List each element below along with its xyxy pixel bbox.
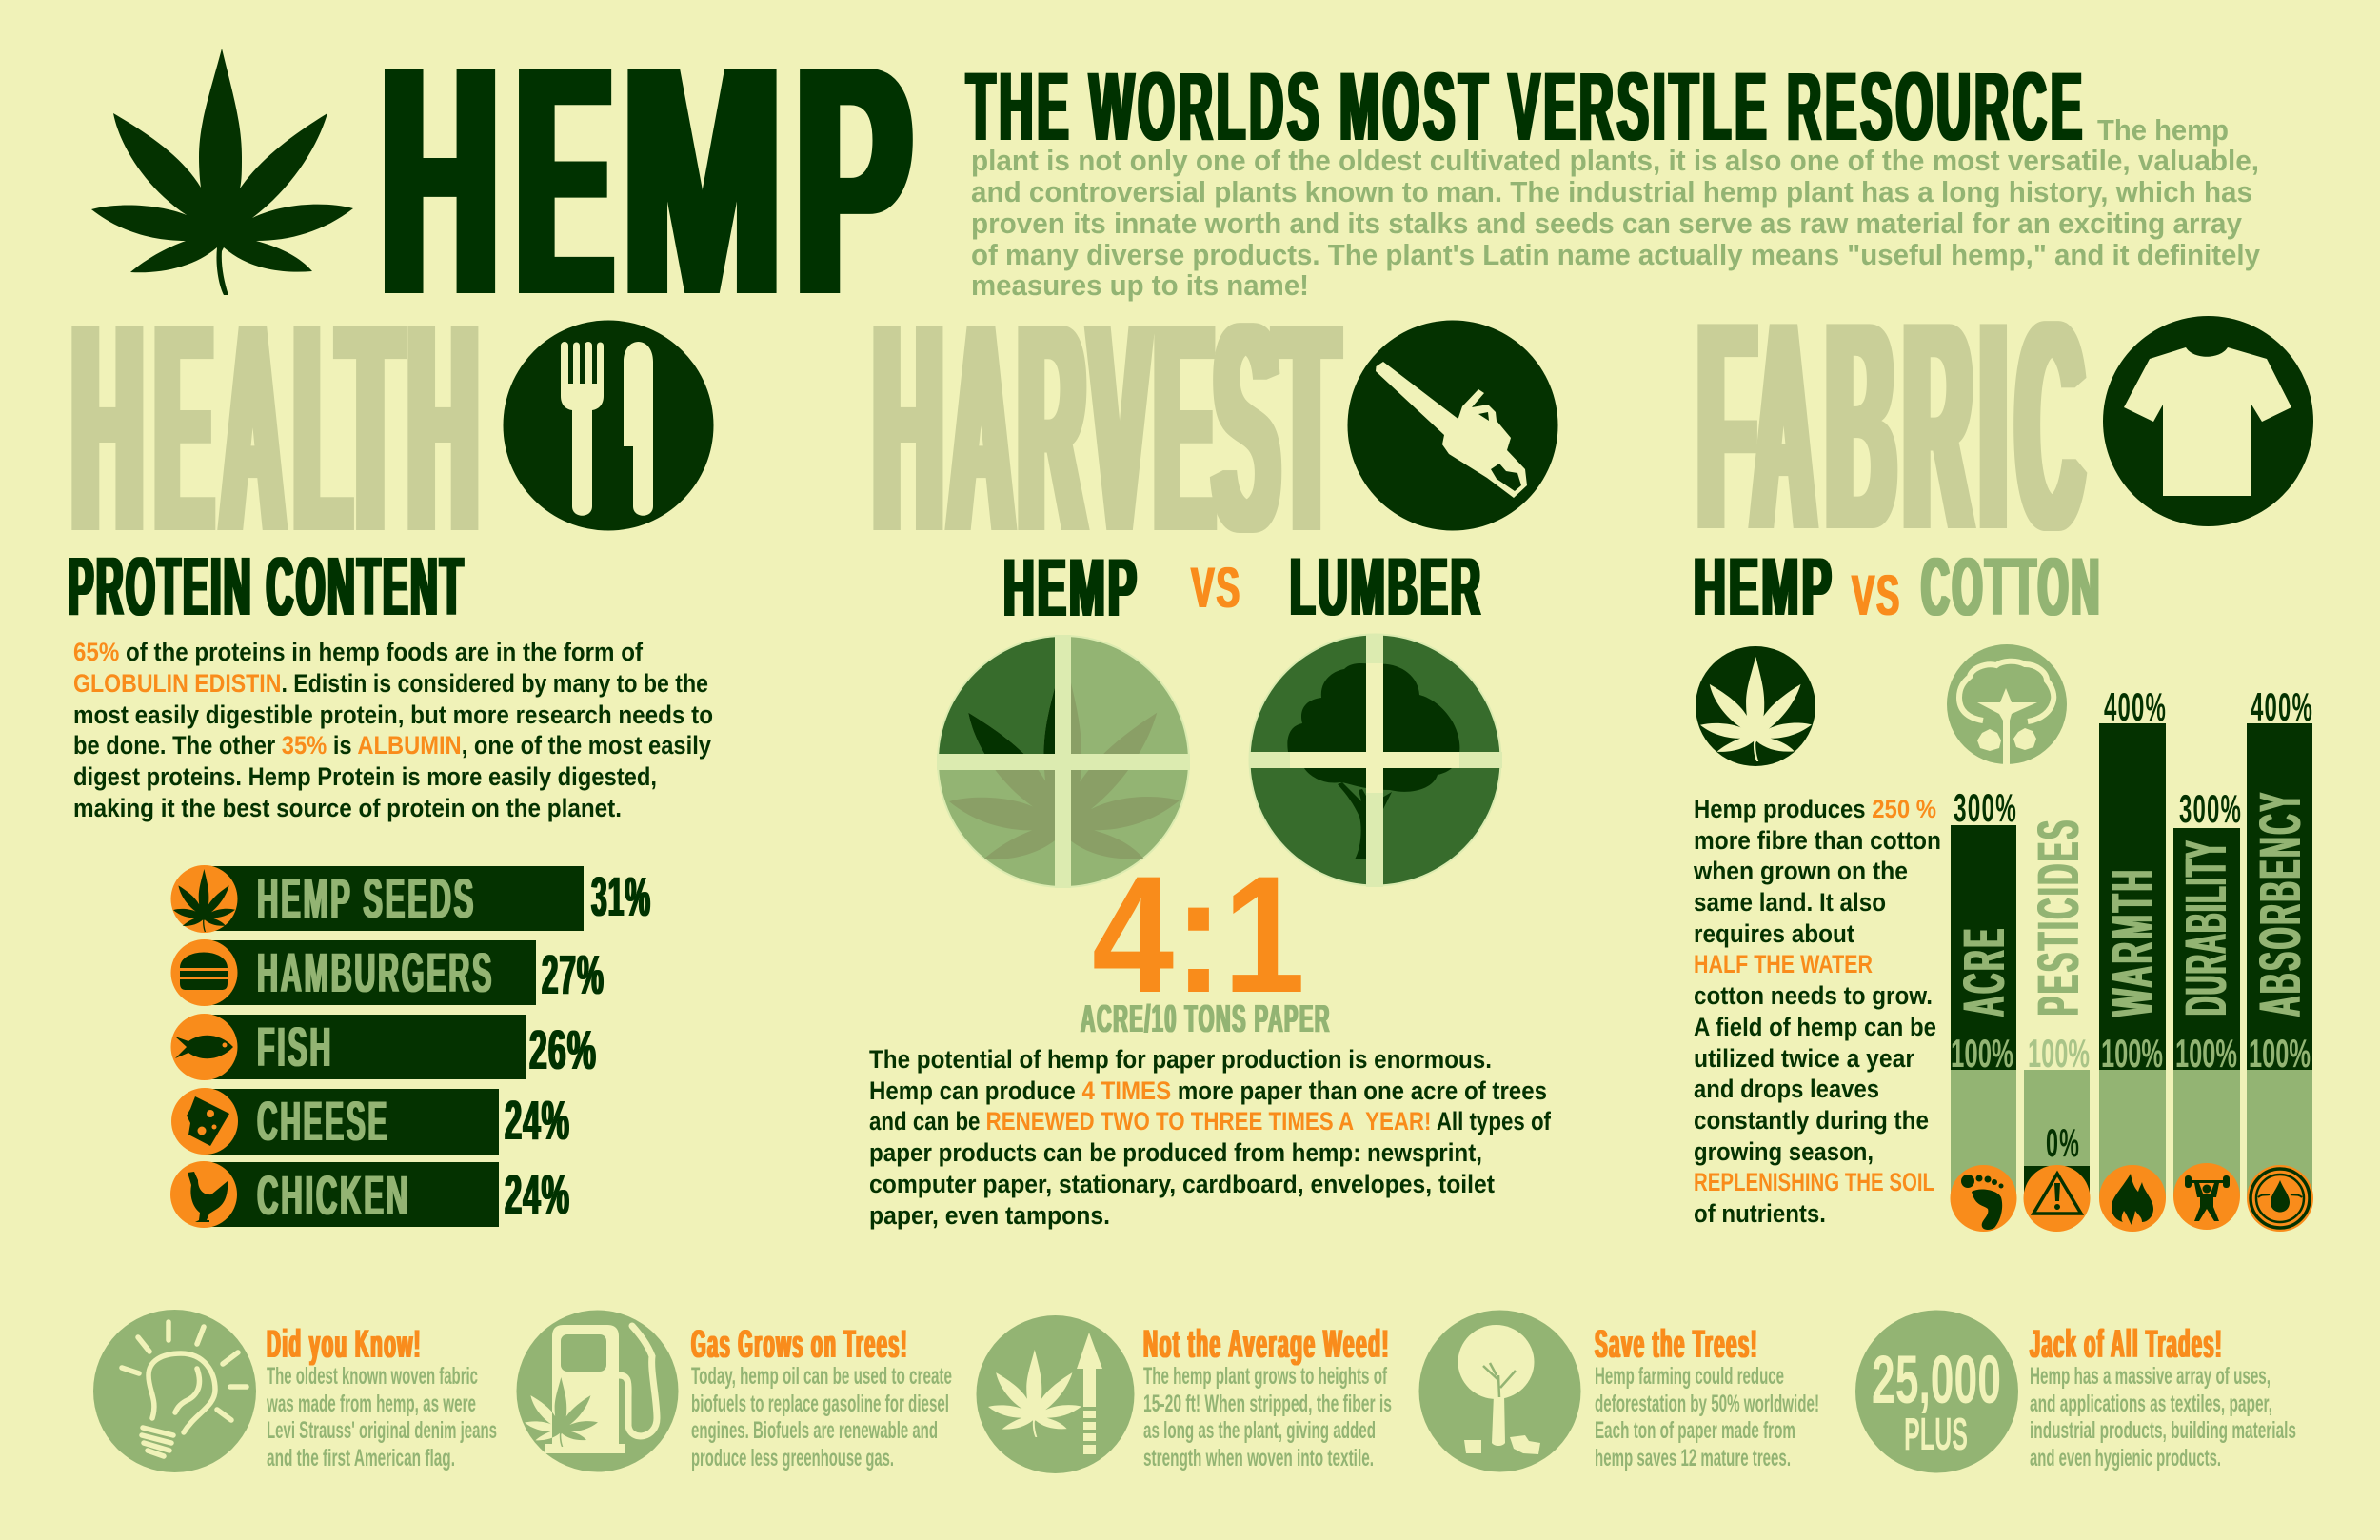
bar: pesticides: 100% [2028, 1031, 2090, 1076]
panel: did you know [93, 1310, 497, 1472]
bar: fish [171, 1014, 597, 1081]
heading: hemp vs lumber: VS [1191, 556, 1241, 620]
text: paper paragraph: The potential of hemp for paper production is enormous. [869, 1045, 1492, 1074]
bar: cheese [171, 1088, 570, 1155]
text: fabric paragraph: more fibre than cotton [1694, 826, 1941, 855]
text: average weed body [1143, 1363, 1392, 1471]
bar: pesticides: 0% [2046, 1120, 2080, 1165]
text: fabric paragraph: same land. It also [1694, 888, 1886, 917]
text: paper paragraph: Hemp can produce 4 TIMES more paper than one acre of trees [869, 1076, 1547, 1105]
bar: warmth [2099, 684, 2167, 1232]
text: did you know body: and the first American flag. [267, 1445, 455, 1471]
text: protein paragraph: digest proteins. Hemp Protein is more easily digested, [73, 762, 657, 791]
text: protein paragraph: most easily digestible protein, but more research needs to [73, 701, 713, 729]
bar: pesticides [2024, 818, 2091, 1232]
bar: cheese: CHEESE [257, 1091, 389, 1153]
header: HEMP title: H [382, 0, 499, 363]
bar: hamburgers [171, 939, 605, 1006]
text: fabric paragraph: REPLENISHING THE SOIL [1694, 1168, 1934, 1196]
header: HEMP title: M [623, 0, 782, 363]
bar: acre: 100% [1951, 1031, 2013, 1076]
text: protein paragraph [73, 638, 713, 822]
bar: chicken: CHICKEN [257, 1165, 410, 1227]
heading: hemp vs cotton: HEMP [1694, 542, 1835, 633]
panel: jack of all trades [1855, 1310, 2296, 1473]
panel: fabric: C [2016, 261, 2083, 592]
bar: warmth: 400% [2104, 684, 2167, 729]
text: fabric paragraph: constantly during the [1694, 1106, 1929, 1135]
icon: 25,000 plus badge: 25,000 [1872, 1343, 2001, 1418]
panel: gas grows on trees: Gas Grows on Trees! [691, 1321, 908, 1366]
stat label: acre per ten tons paper: ACRE/10 TONS PAPER [1081, 997, 1331, 1040]
icon: 25,000 plus badge: PLUS [1904, 1410, 1968, 1460]
bar: durability: DURABILITY [2173, 839, 2238, 1016]
header: intro paragraph: and controversial plants known to man. The industrial hemp plant has a long history, which has [971, 175, 2252, 208]
text: average weed body: as long as the plant, giving added [1143, 1417, 1376, 1444]
heading: HEALTH: E [156, 263, 212, 594]
text: fabric paragraph: of nutrients. [1694, 1199, 1826, 1228]
heading: FABRIC: R [1904, 261, 1972, 592]
heading: HEALTH: L [294, 263, 350, 594]
text: average weed body: 15-20 ft! When stripped, the fiber is [1143, 1391, 1392, 1417]
text: paper paragraph [869, 1045, 1552, 1230]
header: hemp leaf icon [91, 49, 353, 295]
icon: cotton boll badge [1947, 644, 2067, 764]
bar: hemp seeds: 31% [591, 866, 651, 928]
bar: durability: 300% [2179, 786, 2242, 831]
bar: durability: 100% [2175, 1031, 2237, 1076]
heading: HEALTH: T [339, 263, 402, 594]
icon: tree [1418, 1310, 1580, 1471]
heading: hemp vs lumber [1003, 542, 1483, 634]
bar: absorbency: ABSORBENCY [2248, 790, 2312, 1017]
bar: hamburgers: HAMBURGERS [257, 942, 494, 1004]
heading: FABRIC: B [1827, 261, 1895, 592]
heading: HARVEST: R [1019, 263, 1085, 594]
heading: HARVEST: E [1155, 263, 1214, 594]
text: protein paragraph: be done. The other 35% is ALBUMIN, one of the most easily [73, 731, 711, 760]
heading: hemp vs lumber: LUMBER [1290, 542, 1483, 633]
bar: warmth: WARMTH [2100, 867, 2165, 1017]
icon: fork and knife [503, 320, 714, 531]
heading: FABRIC: F [1698, 261, 1755, 592]
text: did you know body: was made from hemp, as were [266, 1391, 476, 1417]
text: average weed body: The hemp plant grows to heights of [1143, 1363, 1387, 1390]
panel: not the average weed [977, 1315, 1392, 1473]
bar: chicken [170, 1161, 570, 1228]
text: fabric paragraph: cotton needs to grow. [1694, 981, 1933, 1010]
icon: light bulb [93, 1310, 256, 1472]
bar: absorbency: 100% [2249, 1031, 2311, 1076]
text: average weed body: strength when woven into textile. [1143, 1445, 1374, 1471]
panel: harvest [869, 263, 1557, 1230]
panel: not the average weed: Not the Average Weed! [1143, 1321, 1390, 1366]
text: fabric paragraph: A field of hemp can be [1694, 1013, 1936, 1041]
header: intro paragraph [971, 113, 2261, 302]
bar: chicken: 24% [505, 1164, 570, 1226]
panel: save the trees [1418, 1310, 1819, 1471]
panel: fabric: COTTON [1921, 542, 2102, 633]
heading: hemp vs cotton: VS [1852, 563, 1901, 627]
text: paper paragraph: paper products can be produced from hemp: newsprint, [869, 1138, 1482, 1167]
text: protein paragraph: making it the best source of protein on the planet. [73, 794, 622, 822]
text: jack of all trades body [2030, 1363, 2296, 1471]
text: fabric paragraph: HALF THE WATER [1694, 950, 1873, 978]
text: fabric paragraph: growing season, [1694, 1137, 1874, 1166]
heading: HARVEST: H [874, 263, 942, 594]
heading: HARVEST: V [1090, 263, 1149, 594]
text: gas grows body: produce less greenhouse gas. [691, 1445, 894, 1471]
bar: absorbency [2247, 684, 2313, 1232]
chart: hemp vs cotton bars: PESTICIDES [2026, 818, 2091, 1016]
icon: 25,000 plus badge [1855, 1310, 2018, 1473]
header: intro paragraph: plant is not only one of the oldest cultivated plants, it is also one of the most versatile, valuable, [971, 144, 2259, 177]
text: save the trees body: Each ton of paper made from [1595, 1417, 1795, 1444]
header: intro paragraph: The hemp [2097, 113, 2229, 147]
text: paper paragraph: and can be RENEWED TWO TO THREE TIMES A YEAR! All types of [869, 1107, 1552, 1135]
heading: FABRIC: I [1980, 261, 2007, 592]
panel: fabric [1693, 261, 2313, 1232]
chart: hemp vs cotton bars [1950, 684, 2313, 1232]
text: jack of all trades body: and even hygienic products. [2030, 1445, 2221, 1471]
icon: t-shirt [2103, 316, 2313, 526]
heading: HEALTH: A [222, 263, 284, 594]
bar: fish: FISH [257, 1017, 333, 1078]
icon: hemp quartered circle [937, 635, 1190, 888]
bar: warmth: 100% [2101, 1031, 2163, 1076]
bar: acre: ACRE [1952, 926, 2016, 1017]
bar: fish: 26% [529, 1019, 597, 1081]
panel: save the trees: Save the Trees! [1595, 1321, 1758, 1366]
stat: 4:1: 4:1 [1092, 842, 1305, 1028]
text: gas grows body: Today, hemp oil can be used to create [691, 1363, 952, 1390]
heading: FABRIC: A [1753, 261, 1815, 592]
text: paper paragraph: paper, even tampons. [869, 1201, 1110, 1230]
icon: leaf and arrow [977, 1315, 1135, 1473]
text: save the trees body [1595, 1363, 1819, 1471]
panel: did you know: Did you Know! [267, 1321, 422, 1366]
text: save the trees body: hemp saves 12 mature trees. [1595, 1445, 1791, 1471]
header: HEMP title: P [796, 0, 911, 363]
text: did you know body [266, 1363, 497, 1471]
bar: acre: 300% [1954, 785, 2017, 830]
text: fabric paragraph: requires about [1694, 919, 1854, 948]
heading: HEALTH: H [71, 263, 143, 594]
bar: absorbency: 400% [2251, 684, 2313, 729]
text: save the trees body: Hemp farming could reduce [1595, 1363, 1784, 1390]
bar: durability [2173, 786, 2242, 1230]
bar: acre [1950, 785, 2017, 1232]
header: intro paragraph: of many diverse products. The plant's Latin name actually means "useful hemp," and it definitely [971, 238, 2261, 271]
bar: cheese: 24% [505, 1090, 570, 1152]
panel: health: PROTEIN CONTENT [69, 541, 466, 633]
icon: lumber tree quartered circle [1249, 634, 1502, 887]
bar: hamburgers: 27% [542, 944, 605, 1006]
text: paper paragraph: computer paper, stationary, cardboard, envelopes, toilet [869, 1170, 1495, 1198]
panel: health [69, 263, 714, 1228]
text: gas grows body: engines. Biofuels are renewable and [691, 1417, 938, 1444]
text: protein paragraph: 65% of the proteins in hemp foods are in the form of [73, 638, 644, 666]
panel: harvest: T [1276, 263, 1338, 594]
panel: gas grows on trees [516, 1310, 952, 1471]
text: gas grows body: biofuels to replace gasoline for diesel [691, 1391, 949, 1417]
chart: protein content bars [170, 865, 651, 1228]
text: fabric paragraph: Hemp produces 250 % [1694, 795, 1936, 823]
text: gas grows body [691, 1363, 952, 1471]
header: intro paragraph: proven its innate worth and its stalks and seeds can serve as raw material for an exciting array [971, 207, 2243, 240]
header: HEMP title: E [517, 0, 612, 363]
heading: hemp vs cotton [1694, 542, 2102, 633]
heading: HARVEST: S [1214, 263, 1279, 594]
heading: HARVEST: A [949, 263, 1013, 594]
text: fabric paragraph: and drops leaves [1694, 1075, 1879, 1103]
text: did you know body: The oldest known woven fabric [267, 1363, 478, 1390]
text: fabric paragraph: when grown on the [1693, 857, 1908, 885]
text: save the trees body: deforestation by 50% worldwide! [1595, 1391, 1819, 1417]
text: fabric paragraph: utilized twice a year [1694, 1044, 1914, 1073]
text: fabric paragraph [1693, 795, 1941, 1228]
bar: hemp seeds: HEMP SEEDS [257, 868, 476, 930]
icon: chainsaw [1348, 320, 1557, 531]
header: intro paragraph: measures up to its name! [971, 268, 1309, 302]
text: did you know body: Levi Strauss' original denim jeans [267, 1417, 497, 1444]
icon: gas pump [516, 1310, 678, 1471]
text: protein paragraph: GLOBULIN EDISTIN. Edistin is considered by many to be the [73, 669, 708, 698]
heading: hemp vs lumber: HEMP [1003, 543, 1140, 634]
panel: health: H [407, 263, 478, 594]
icon: hemp leaf badge [1696, 646, 1815, 766]
